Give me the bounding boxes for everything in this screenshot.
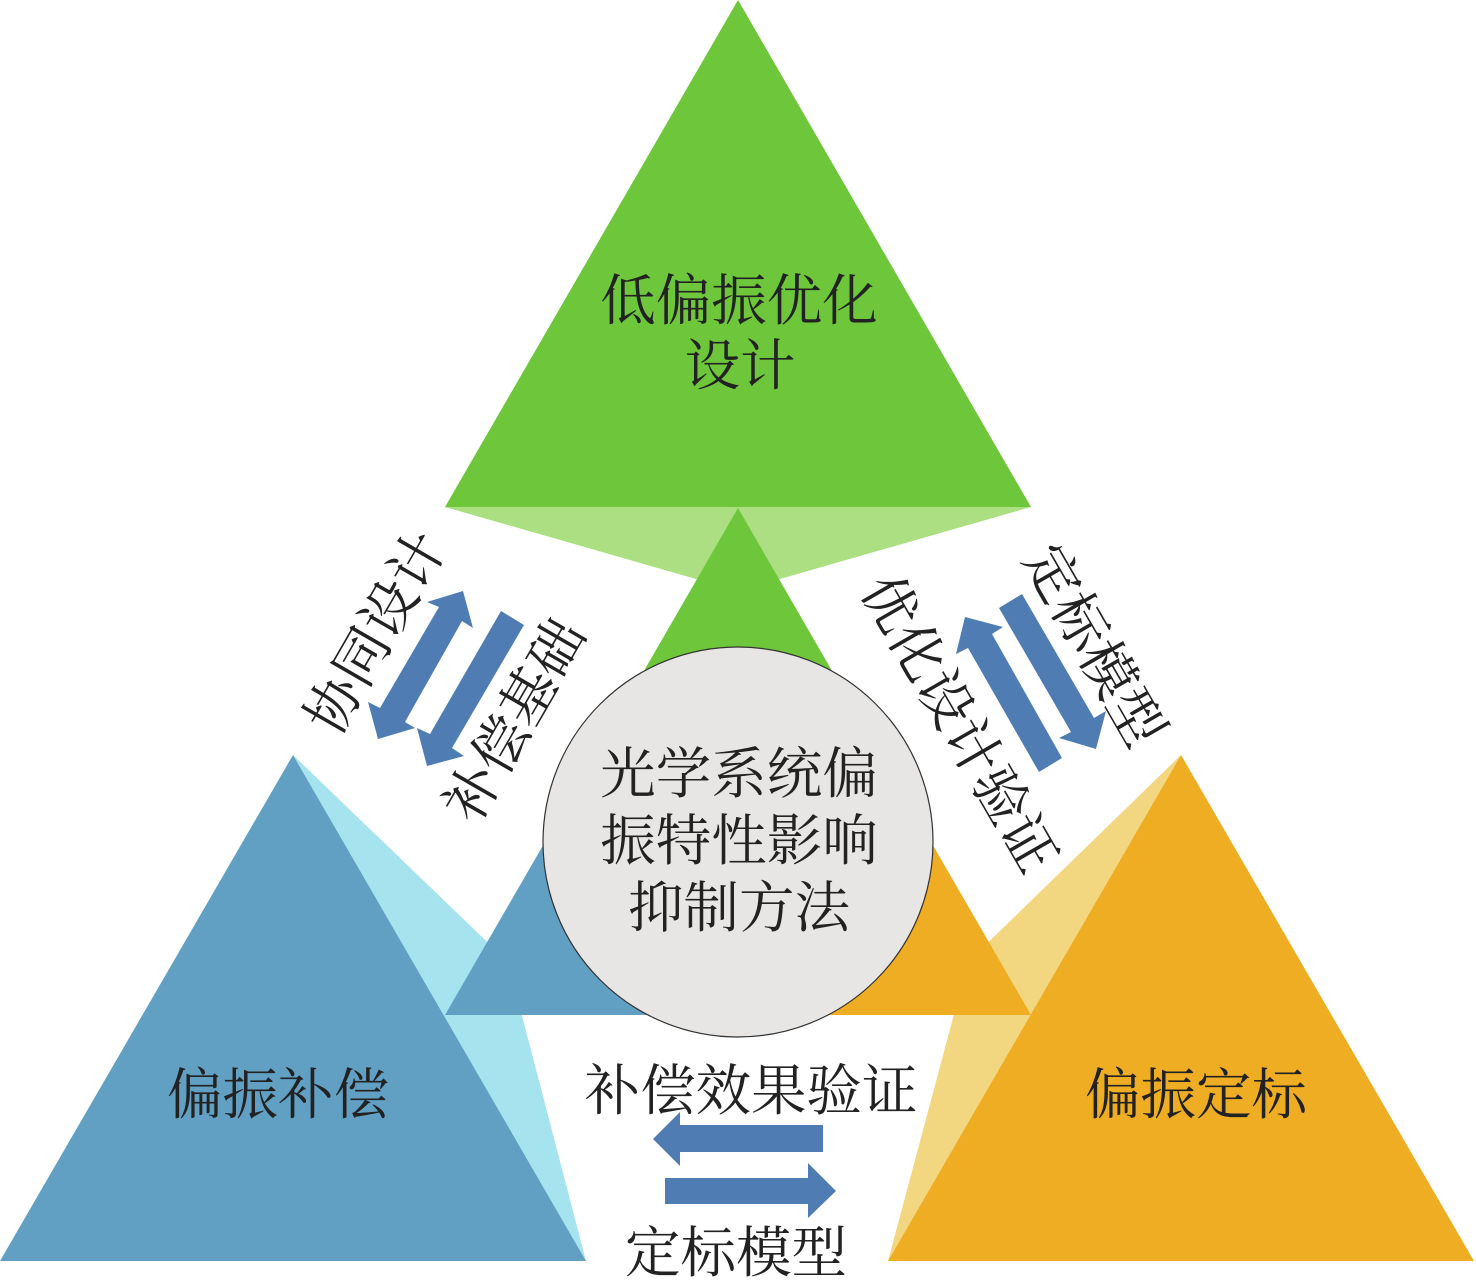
arrow: calibration model, right pointing xyxy=(665,1163,836,1218)
shadow facet: light blue xyxy=(293,755,586,1261)
panel: polarization calibration triangle xyxy=(888,755,1474,1261)
central circle with title xyxy=(543,647,933,1037)
arrow: double-headed, collaborative design xyxy=(368,591,473,739)
label: calibration model, rotated: 定标模型 xyxy=(1011,535,1175,758)
label: optimization design verification: 优化设计验证 xyxy=(848,565,1068,884)
center title line 1: 光学系统偏 xyxy=(600,745,878,806)
shadow facet: green xyxy=(445,507,1031,591)
center title line 2: 振特性影响 xyxy=(600,812,878,873)
central triangle: orange part xyxy=(816,816,1031,1015)
panel: low polarization optimization design triangle xyxy=(445,0,1031,507)
heading: design line two: 设计 xyxy=(684,337,796,398)
arrow: optimization design verification xyxy=(956,617,1062,772)
center title line 3: 抑制方法 xyxy=(628,879,850,940)
arrow: calibration model, right side xyxy=(999,594,1106,749)
label: compensation effect verification: 补偿效果验证 xyxy=(584,1062,918,1123)
panel: polarization compensation triangle xyxy=(0,755,586,1261)
central triangle: green part xyxy=(600,508,876,747)
arrow: compensation effect verification, left pointing xyxy=(653,1112,823,1166)
label: calibration model, bottom: 定标模型 xyxy=(625,1224,847,1285)
heading: polarization compensation: 偏振补偿 xyxy=(167,1066,389,1127)
label: compensation basis: 补偿基础 xyxy=(434,610,598,833)
heading: polarization calibration: 偏振定标 xyxy=(1085,1066,1308,1127)
heading: low polarization design: 低偏振优化 xyxy=(600,272,878,333)
central triangle: blue part xyxy=(445,816,660,1015)
shadow facet: light orange xyxy=(888,755,1181,1261)
label: collaborative design: 协同设计 xyxy=(295,522,459,745)
arrow: compensation basis xyxy=(417,611,524,766)
